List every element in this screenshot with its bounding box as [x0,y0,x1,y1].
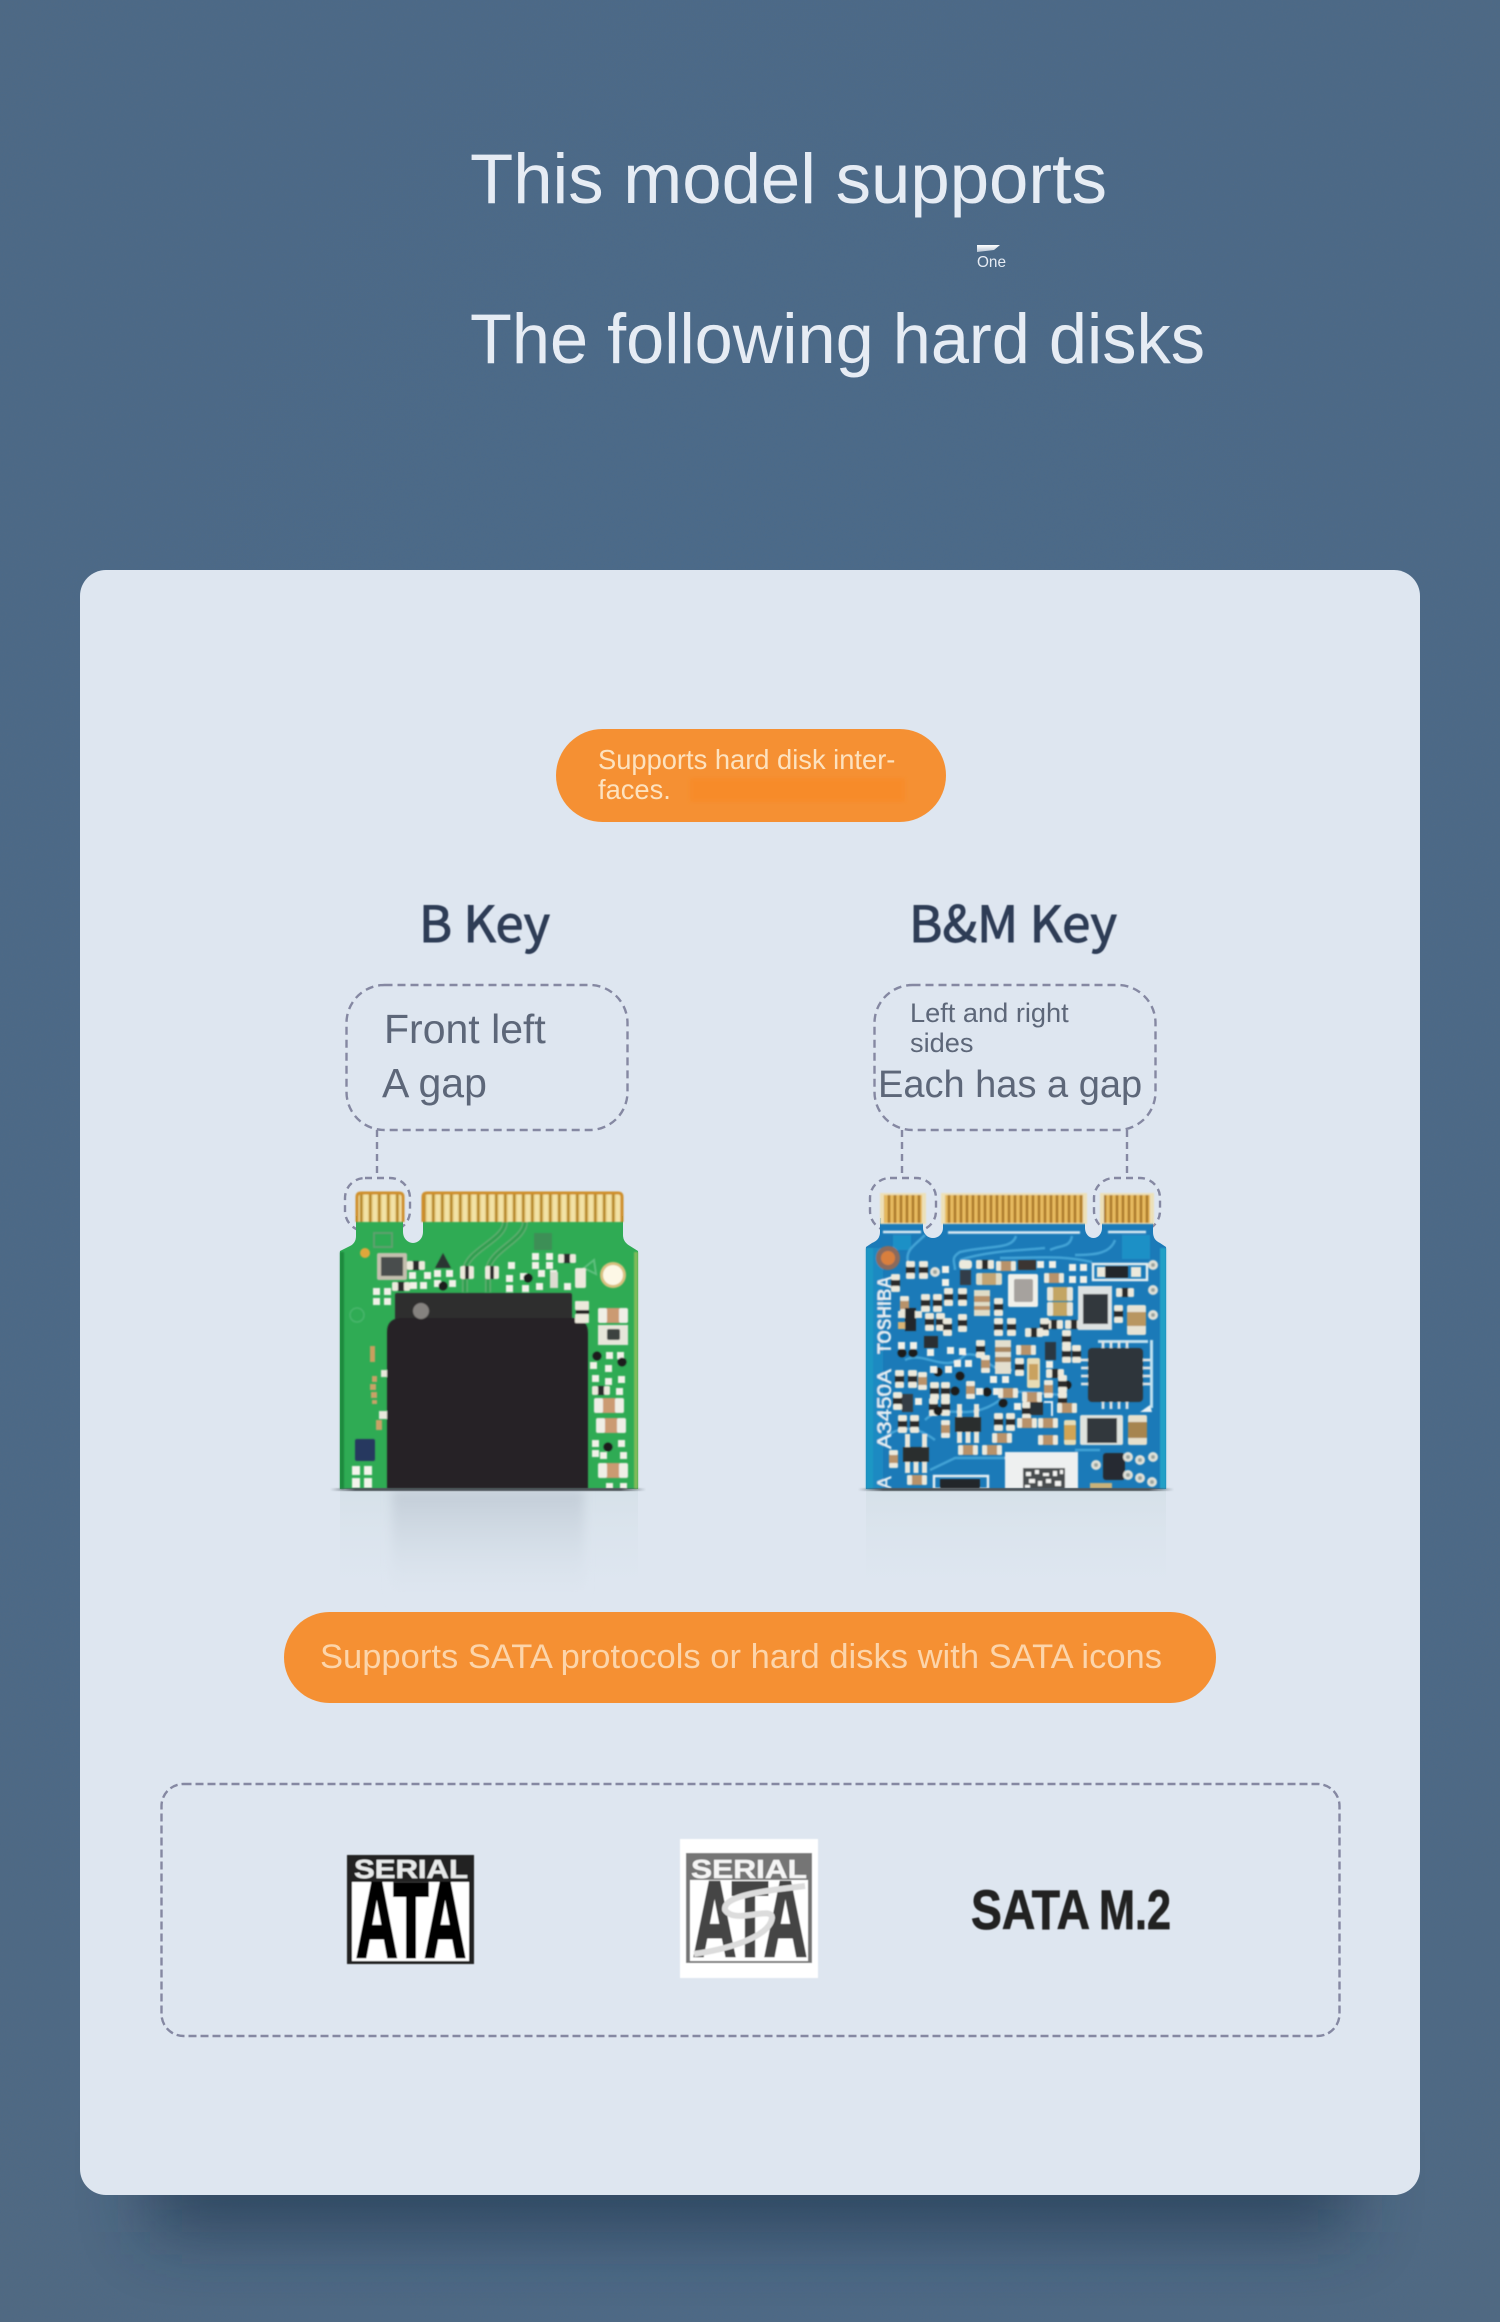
logo: Serial ATA black: SERIAL [354,1854,468,1884]
pill: SATA protocols [284,1612,1216,1703]
callout: B Key gap: A gap [382,1060,487,1106]
SSD: B&M Key blue board: A3450A [875,1369,896,1449]
panel: main card [80,570,1420,2232]
title: This model supports [470,139,1107,218]
panel: SATA logos box [162,1784,1340,2036]
small note: One: One [977,254,1006,271]
small note: One [977,245,1006,271]
callout: B&M Key gaps: Each has a gap [878,1064,1142,1106]
logo: Serial ATA black: ATA [356,1860,466,1980]
callout: B Key gap [345,985,628,1231]
title: The following hard disks [470,299,1205,378]
heading: B&M Key: B&M Key [909,885,1117,957]
logo: Serial ATA grey with swoosh: ATA [693,1859,807,1979]
logo: Serial ATA grey with swoosh: SERIAL [691,1854,807,1884]
callout: B&M Key gaps: sides [910,1027,973,1058]
logo: Serial ATA black [347,1854,474,1980]
SSD: B&M Key blue board: TOSHIBA [875,1276,896,1354]
pill: supports interfaces: faces. [598,774,671,805]
pill: supports interfaces: Supports hard disk inter- [598,744,895,775]
logo: SATA M.2: SATA [971,1878,1090,1941]
pill: supports interfaces [556,729,946,822]
SSD: B Key green board [330,1193,646,1608]
logo: SATA M.2: M.2 [1099,1878,1171,1941]
callout: B&M Key gaps [870,985,1160,1231]
pill: SATA protocols: Supports SATA protocols or hard disks with SATA icons [320,1638,1162,1676]
logo: Serial ATA grey with swoosh [680,1839,818,1979]
callout: B&M Key gaps: Left and right [910,997,1069,1028]
callout: B Key gap: Front left [384,1006,546,1052]
SSD: B&M Key blue board: A [875,1476,896,1489]
SSD: B&M Key blue board [858,1193,1174,1608]
heading: B Key: B Key [419,885,550,957]
title [470,139,1205,378]
